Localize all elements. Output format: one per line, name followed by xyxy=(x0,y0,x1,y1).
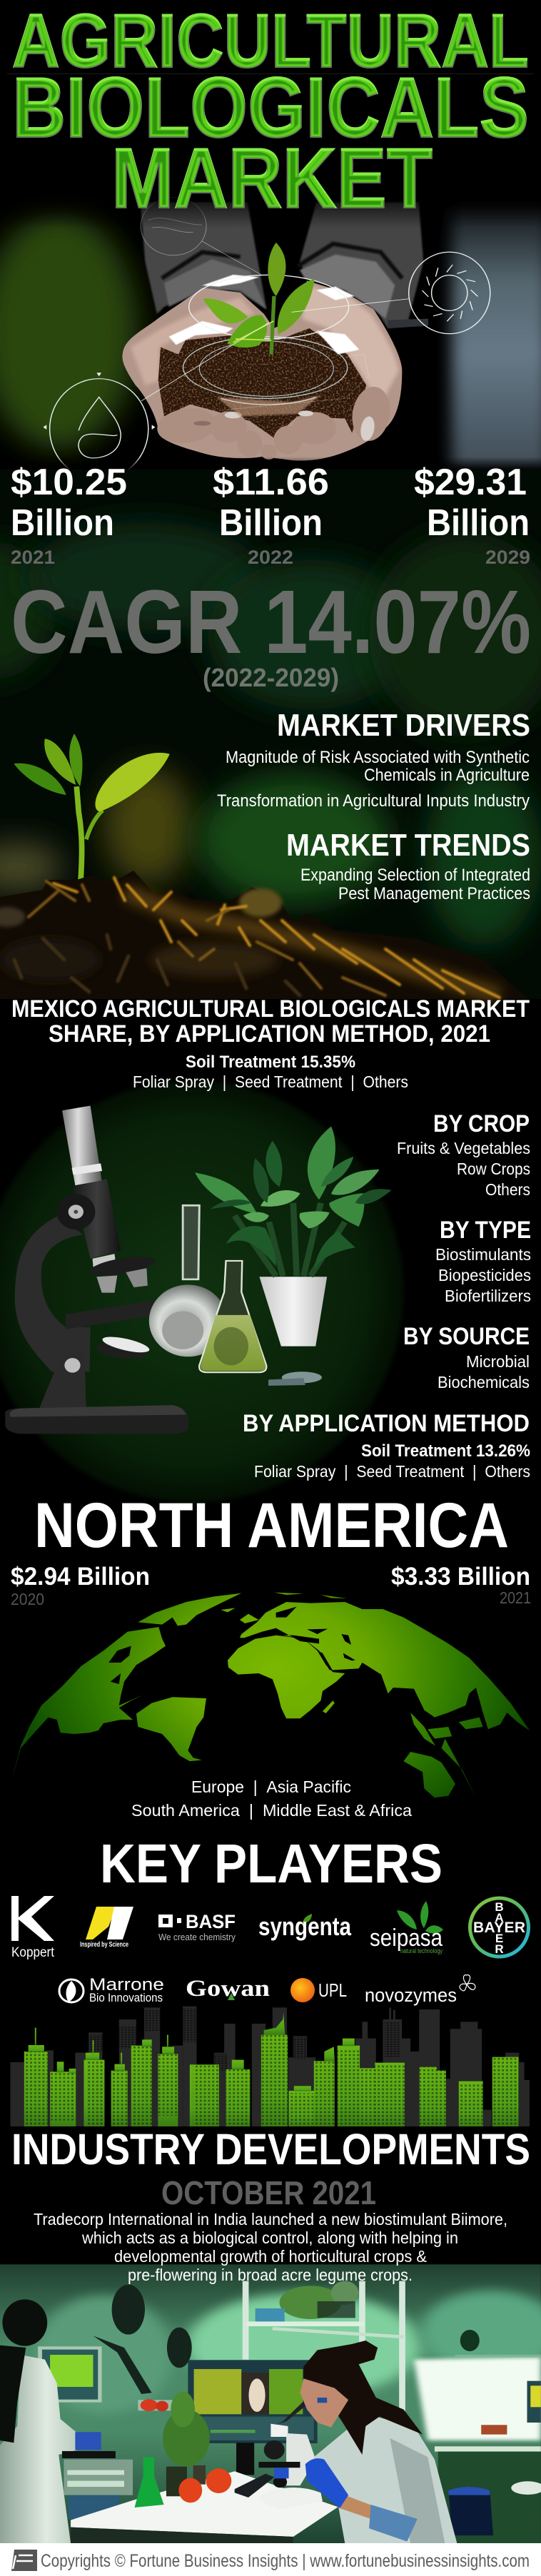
CAGR figure: (2022-2029) xyxy=(203,663,339,692)
left scientist xyxy=(0,2299,101,2543)
list: by crop xyxy=(397,1110,530,1199)
text block: development description: developmental growth of horticultural crops & xyxy=(114,2247,427,2266)
list: by type xyxy=(435,1217,531,1305)
microscope xyxy=(258,2401,323,2509)
seedling xyxy=(203,243,315,355)
text block: development description: which acts as a biological control, along with helping in xyxy=(81,2228,458,2247)
soil mound xyxy=(0,871,528,999)
logo: Marrone Bio Innovations: Bio Innovations xyxy=(89,1991,163,2004)
stat: North America 2021 xyxy=(391,1563,531,1607)
list: by application method xyxy=(243,1410,530,1481)
illustration: microscope, flasks and plant xyxy=(5,1106,392,1434)
cupped hands xyxy=(122,280,402,461)
logo: Bayer: B xyxy=(495,1900,504,1914)
logo: Marrone Bio Innovations xyxy=(59,1975,164,2004)
logo: Gowan: Gowan xyxy=(186,1976,270,2002)
heading: key players: KEY PLAYERS xyxy=(100,1833,443,1895)
dark background plant xyxy=(93,2285,192,2394)
tomatoes xyxy=(178,2468,231,2503)
logo: UPL: UPL xyxy=(318,1979,347,2001)
chart: green world map globe xyxy=(12,1593,530,1798)
stat: 2022 market size: Billion xyxy=(219,502,323,544)
logo: novozymes: novozymes xyxy=(365,1984,457,2006)
logo: Bayer: BAYER xyxy=(473,1920,525,1936)
stat: North America 2021: $3.33 Billion xyxy=(391,1563,530,1591)
logo: syngenta: syngenta xyxy=(258,1912,352,1941)
heading: Mexico market share: Soil Treatment 15.35% xyxy=(186,1053,355,1072)
fingers xyxy=(155,384,394,460)
white plant pot xyxy=(259,1277,327,1347)
logo: PI Industries xyxy=(80,1907,133,1949)
logo: Bayer: A xyxy=(495,1911,504,1925)
panel: market size section background with soil and sprout xyxy=(0,470,541,999)
logo: Bayer: R xyxy=(495,1942,504,1956)
fade into the next section xyxy=(0,189,541,228)
logo: UPL xyxy=(290,1978,347,2002)
stat: 2021 market size: Billion xyxy=(11,502,114,544)
round flask xyxy=(149,1205,227,1357)
microscope xyxy=(5,1106,188,1434)
heading: Mexico market share: Foliar Spray | Seed Treatment | Others xyxy=(133,1073,408,1091)
panel: segmentation section glow xyxy=(0,1077,407,1506)
sprout xyxy=(14,734,170,881)
text block: market trends xyxy=(286,828,530,903)
list: by application method: Soil Treatment 13.26% xyxy=(361,1441,530,1461)
heading: Mexico market share xyxy=(11,995,530,1091)
title: MARKET xyxy=(111,131,433,226)
list: by crop: Others xyxy=(485,1180,530,1199)
list: by type: BY TYPE xyxy=(440,1217,531,1244)
stat: 2021 market size xyxy=(11,462,127,568)
soil xyxy=(158,328,366,437)
lab bench cabinet xyxy=(62,2399,181,2519)
logo: seipasa: natural technology xyxy=(400,1947,443,1954)
logo: Bayer: E xyxy=(495,1932,503,1945)
logo: Marrone Bio Innovations: Marrone xyxy=(89,1975,164,1994)
icon: Fortune Business Insights logo xyxy=(11,2550,37,2571)
panel: hero photo of hands holding seedling xyxy=(0,189,541,480)
stat: 2022 market size: $11.66 xyxy=(213,462,329,503)
list: by crop: BY CROP xyxy=(433,1110,530,1137)
list: by source: Biochemicals xyxy=(438,1373,530,1391)
stat: 2021 market size: $10.25 xyxy=(11,462,127,503)
keyboard xyxy=(235,2474,274,2498)
golden straw highlights xyxy=(54,878,500,998)
stat: 2029 market size: 2029 xyxy=(485,547,530,568)
stat: North America 2020: $2.94 Billion xyxy=(11,1563,150,1591)
logos: key players xyxy=(11,1896,528,2006)
logo: Koppert: Koppert xyxy=(11,1945,55,1960)
blurred blue-grey background xyxy=(452,207,541,473)
logo: Koppert xyxy=(11,1896,55,1960)
green flask xyxy=(134,2457,164,2507)
potted plant leaves xyxy=(195,1127,392,1276)
right counter xyxy=(435,2381,541,2544)
logo: novozymes xyxy=(365,1975,475,2006)
seas cut into the land masses xyxy=(108,1607,355,1684)
list: by source: Microbial xyxy=(466,1352,530,1371)
text block: development description: pre-flowering in broad acre legume crops. xyxy=(128,2266,413,2284)
grey background buildings xyxy=(10,2007,530,2126)
illustration: green city skyline xyxy=(10,2007,530,2126)
title xyxy=(12,0,529,226)
central monitor xyxy=(188,2360,318,2475)
shelving with plants xyxy=(246,2281,541,2438)
logo: BASF: We create chemistry xyxy=(158,1932,236,1942)
list: by type: Biopesticides xyxy=(438,1266,531,1284)
logo: seipasa: seipasa xyxy=(370,1925,443,1952)
list: by type: Biofertilizers xyxy=(445,1287,531,1305)
text block: other regions: South America | Middle East & Africa xyxy=(131,1801,412,1820)
heading: Mexico market share: SHARE, BY APPLICATION METHOD, 2021 xyxy=(49,1020,490,1048)
golden lit band along the ridge xyxy=(125,892,500,995)
logo: Bayer xyxy=(470,1898,528,1957)
logo: BASF: BASF xyxy=(186,1911,236,1932)
text block: other regions xyxy=(131,1778,412,1820)
green foreground buildings xyxy=(24,2012,518,2126)
stat: 2022 market size: 2022 xyxy=(248,547,293,568)
list: by source xyxy=(403,1323,530,1391)
petri dishes xyxy=(268,1371,322,1386)
table plant xyxy=(163,2392,210,2496)
logo: PI Industries: Inspired by Science xyxy=(80,1941,128,1949)
stat: North America 2021: 2021 xyxy=(500,1588,531,1607)
text block: development description xyxy=(34,2210,507,2284)
blurred green field background xyxy=(0,213,138,450)
stat: 2022 market size xyxy=(213,462,329,568)
glass dome rings xyxy=(163,275,369,410)
stat: 2029 market size: Billion xyxy=(427,502,530,544)
list: by crop: Row Crops xyxy=(457,1160,530,1178)
text block: development description: Tradecorp International in India launched a new biostimulant Biimore, xyxy=(34,2210,507,2228)
woman at microscope xyxy=(274,2341,457,2543)
logo: seipasa xyxy=(370,1901,443,1954)
sleeves of the sweater xyxy=(141,202,428,328)
left monitor xyxy=(38,2346,102,2403)
cupped hands and seedling photo xyxy=(122,202,428,461)
stat: 2029 market size xyxy=(414,462,530,568)
HUD rings and connector lines xyxy=(43,198,490,480)
stat: 2021 market size: 2021 xyxy=(11,547,55,568)
date: October 2021: OCTOBER 2021 xyxy=(161,2174,376,2211)
stat: North America 2020: 2020 xyxy=(11,1590,44,1608)
table xyxy=(71,2471,338,2537)
text block: other regions: Europe | Asia Pacific xyxy=(191,1778,351,1796)
stat: North America 2020 xyxy=(11,1563,150,1608)
list: by type: Biostimulants xyxy=(435,1245,531,1264)
conical flask xyxy=(199,1261,266,1372)
stat: 2029 market size: $29.31 xyxy=(414,462,527,503)
list: by crop: Fruits & Vegetables xyxy=(397,1139,530,1157)
bright wall glow xyxy=(186,2293,421,2398)
panel: laboratory photo xyxy=(0,2264,541,2544)
glass lens flare highlights xyxy=(169,275,359,355)
logo: BASF xyxy=(158,1911,236,1942)
footer xyxy=(0,2543,541,2576)
text block: market drivers xyxy=(217,708,530,811)
